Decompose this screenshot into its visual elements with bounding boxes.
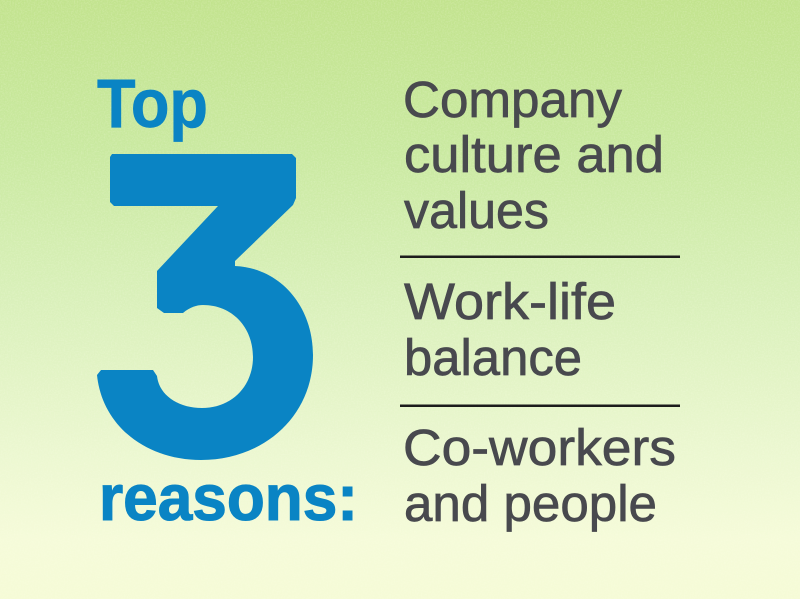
reason 2: work-life balance: balance xyxy=(404,329,582,386)
reason 3: co-workers and people: Co-workers xyxy=(403,419,676,476)
reason 3: co-workers and people xyxy=(403,419,676,532)
reason 1: company culture and values: values xyxy=(404,182,549,239)
heading: reasons: reasons: xyxy=(99,461,358,534)
reason 1: company culture and values: Company xyxy=(403,71,622,128)
reason 2: work-life balance: Work-life xyxy=(404,273,616,330)
reason 3: co-workers and people: and people xyxy=(404,475,657,532)
reason 1: company culture and values xyxy=(403,71,664,239)
numeral 3 xyxy=(97,154,313,460)
reason 1: company culture and values: culture and xyxy=(404,126,664,183)
reason 2: work-life balance xyxy=(404,273,616,386)
heading: Top: Top xyxy=(97,65,208,142)
